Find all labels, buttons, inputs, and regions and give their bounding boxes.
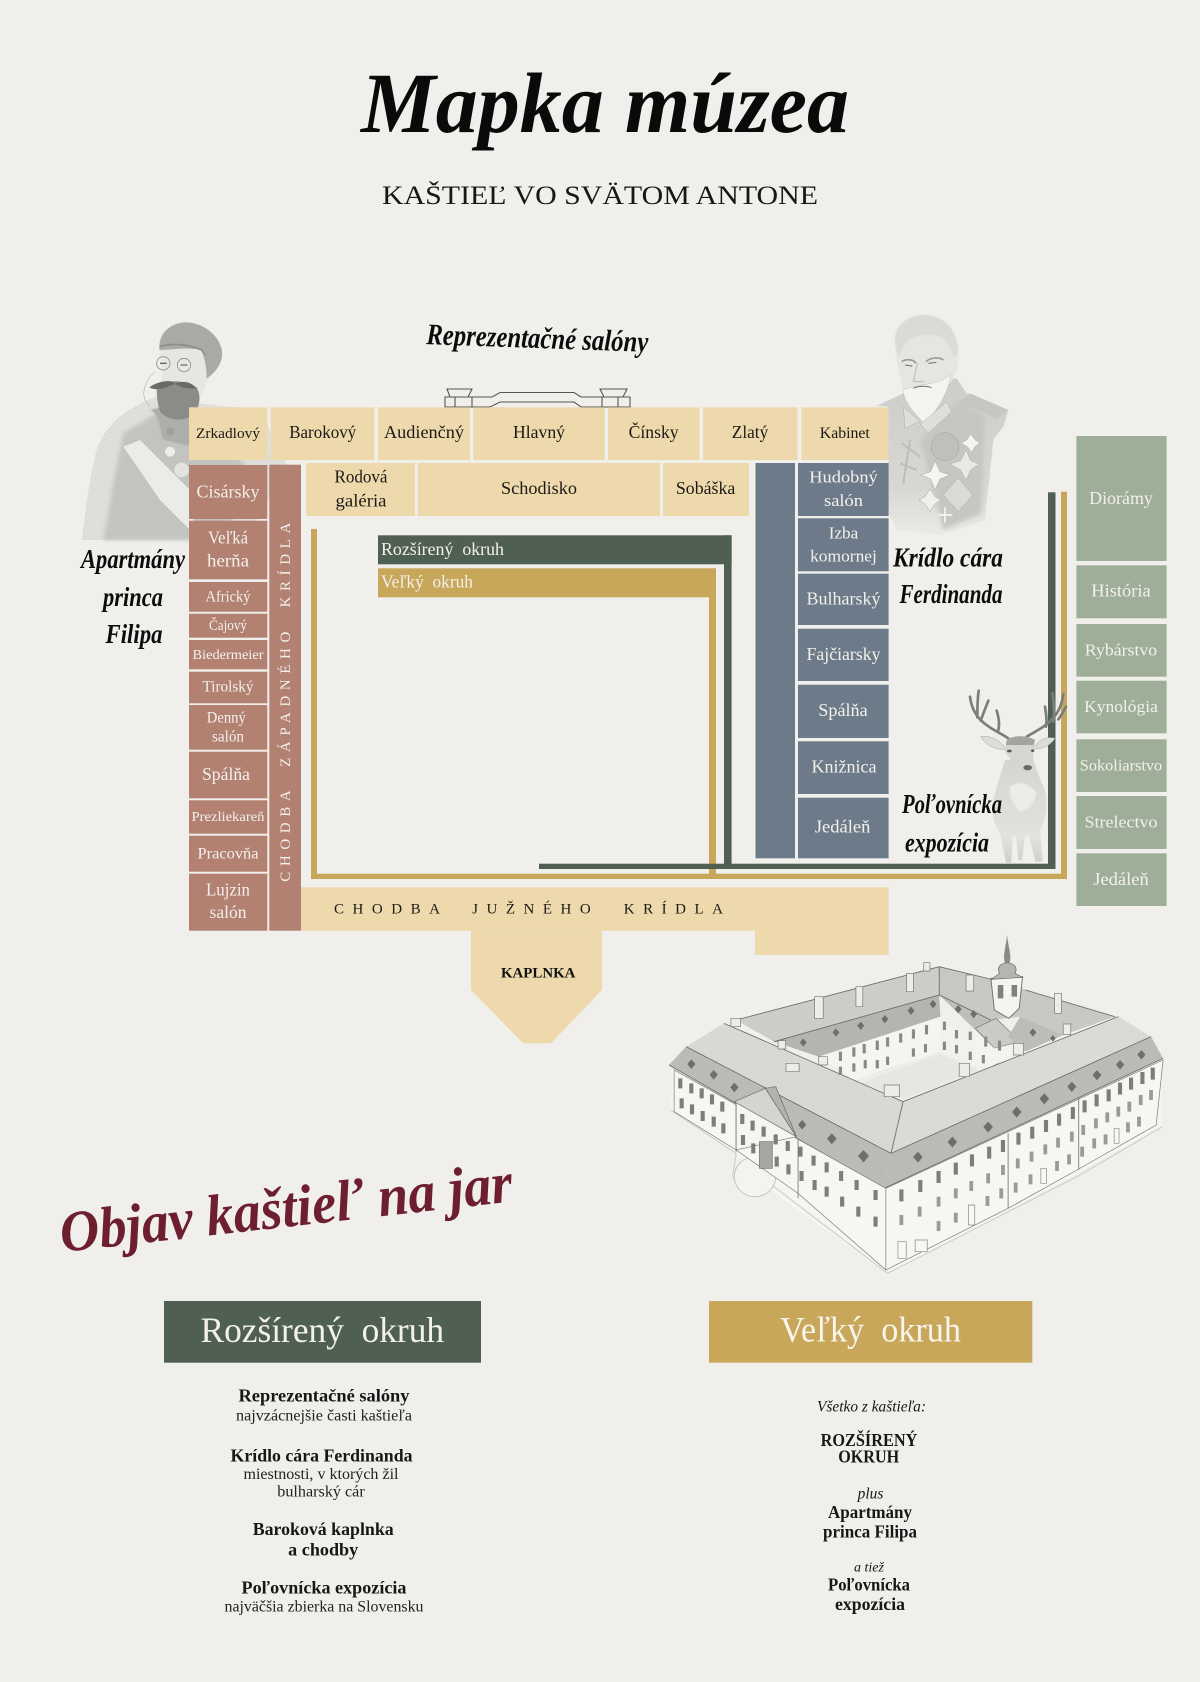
corridor: Chodba južného krídla	[301, 887, 889, 955]
room: Veľká herňa	[189, 521, 267, 579]
room: Biedermeier	[189, 640, 267, 669]
text: Reprezentačné salóny	[236, 1386, 412, 1425]
text: Rozšírený okruh	[821, 1429, 917, 1467]
room: Bulharský	[798, 574, 889, 625]
label: Apartmány princa Filipa: princa	[101, 582, 163, 612]
label: Krídlo cára Ferdinanda: Krídlo cára	[892, 543, 1003, 573]
room: Hlavný: Hlavný	[513, 422, 565, 442]
text: Krídlo cára Ferdinanda: Krídlo cára Ferdinanda	[230, 1446, 412, 1466]
room: Jedáleň	[798, 798, 889, 858]
room: Kabinet: Kabinet	[820, 425, 870, 442]
room: Izba komornej: komornej	[810, 547, 877, 566]
icon: building outline above main hall	[445, 389, 630, 407]
route line: Rozšírený okruh	[539, 492, 1056, 869]
room: Sobáška	[663, 463, 749, 516]
room: Zlatý: Zlatý	[732, 422, 768, 442]
label: Apartmány princa Filipa	[79, 544, 186, 649]
courtyard windows	[840, 1022, 1000, 1075]
room: Rodová galéria: Rodová	[334, 467, 388, 487]
panel header: Rozšírený okruh: Rozšírený okruh	[200, 1310, 444, 1350]
dormers and chimneys	[687, 1000, 1146, 1163]
corridor: Krídlo cára Ferdinanda	[756, 463, 795, 858]
text: Baroková kaplnka a chodby: Baroková kaplnka	[253, 1519, 394, 1539]
title: Mapka múzea	[359, 55, 849, 151]
room: Schodisko: Schodisko	[501, 478, 577, 498]
text: Baroková kaplnka a chodby	[253, 1519, 394, 1560]
text: Poľovnícka expozícia: Poľovnícka expozícia	[242, 1577, 406, 1597]
room: Veľká herňa: Veľká	[208, 527, 248, 547]
label: Apartmány princa Filipa: Filipa	[105, 619, 162, 649]
portrait: tsar Ferdinand	[877, 315, 1008, 535]
room: Sobáška: Sobáška	[676, 478, 735, 498]
room: Biedermeier: Biedermeier	[192, 648, 264, 663]
chapel: Kaplnka	[471, 931, 602, 1043]
room: Strelectvo	[1076, 796, 1167, 849]
legend bar: Veľký okruh	[378, 568, 716, 597]
panel: Veľký okruh	[709, 1301, 1032, 1614]
room: Barokový: Barokový	[289, 422, 356, 442]
corridor: Chodba južného krídla: CHODBA JUŽNÉHO KRÍDLA	[334, 900, 723, 917]
room: Rybárstvo	[1076, 624, 1167, 677]
corridor: Chodba západného krídla	[269, 465, 301, 931]
chapel: Kaplnka: KAPLNKA	[501, 966, 576, 982]
room: Pracovňa	[189, 836, 267, 872]
room: Izba komornej	[798, 518, 889, 571]
text: a tiež Poľovnícka expozícia: a tiež	[854, 1561, 885, 1576]
text: Reprezentačné salóny: najvzácnejšie časti kaštieľa	[236, 1408, 412, 1425]
label: Poľovnícka expozícia: expozícia	[905, 828, 989, 858]
room: Jedáleň: Jedáleň	[815, 817, 870, 837]
room: Audienčný	[378, 407, 470, 460]
room: Lujzin salón: Lujzin	[206, 880, 250, 900]
room: Lujzin salón	[189, 874, 267, 931]
text: Rozšírený okruh: ROZŠÍRENÝ	[821, 1429, 917, 1450]
room: Sokoliarstvo	[1076, 739, 1167, 792]
text: a tiež Poľovnícka expozícia: expozícia	[835, 1594, 905, 1614]
route line: Veľký okruh	[311, 492, 1067, 879]
illustration: manor house	[669, 935, 1163, 1273]
label: Poľovnícka expozícia: Poľovnícka	[901, 789, 1002, 819]
label: Poľovnícka expozícia	[901, 789, 1002, 858]
panel header: Veľký okruh	[709, 1301, 1032, 1363]
portrait: prince Filip	[82, 322, 287, 540]
tower	[991, 977, 1023, 1018]
room: Cisársky: Cisársky	[196, 481, 260, 501]
text: a tiež Poľovnícka expozícia	[828, 1561, 910, 1614]
room: Prezliekareň	[189, 800, 267, 834]
room: Zrkadlový	[189, 407, 267, 460]
room: Jedáleň: Jedáleň	[1093, 869, 1149, 889]
label: Apartmány princa Filipa: Apartmány	[79, 544, 186, 574]
text: Poľovnícka expozícia: najväčšia zbierka na Slovensku	[224, 1599, 424, 1616]
panel header: Rozšírený okruh	[164, 1301, 481, 1363]
room: Strelectvo: Strelectvo	[1085, 813, 1157, 832]
legend bar: Rozšírený okruh: Rozšírený okruh	[381, 539, 504, 559]
text: plus Apartmány princa Filipa: princa Filipa	[823, 1522, 917, 1542]
room: Jedáleň	[1076, 853, 1167, 906]
room: Diorámy	[1076, 436, 1167, 561]
room: Spálňa	[189, 752, 267, 798]
room: História	[1076, 565, 1167, 618]
room: Zlatý	[703, 407, 798, 460]
text: plus Apartmány princa Filipa	[823, 1486, 917, 1542]
room: Bulharský: Bulharský	[806, 588, 880, 608]
room: Diorámy: Diorámy	[1089, 488, 1153, 508]
room: Spálňa: Spálňa	[818, 700, 868, 720]
room: Tirolský	[189, 672, 267, 703]
room: Denný salón: Denný	[207, 709, 246, 726]
room: Sokoliarstvo: Sokoliarstvo	[1080, 758, 1162, 775]
room: Audienčný: Audienčný	[384, 422, 464, 442]
room: Prezliekareň: Prezliekareň	[192, 810, 264, 825]
room: Zrkadlový: Zrkadlový	[196, 426, 261, 442]
room: Denný salón	[189, 705, 267, 750]
label: Krídlo cára Ferdinanda	[892, 543, 1003, 609]
windows	[680, 1068, 1153, 1227]
legend bar: Veľký okruh: Veľký okruh	[381, 572, 473, 592]
legend bar: Rozšírený okruh	[378, 535, 732, 564]
room: Africký	[189, 582, 267, 612]
room: Cisársky	[189, 465, 267, 519]
text: Krídlo cára Ferdinanda: bulharský cár	[277, 1484, 366, 1501]
room: Hudobný salón: Hudobný	[809, 467, 878, 486]
room: Barokový	[271, 407, 374, 460]
room: Fajčiarsky	[798, 629, 889, 681]
room: Pracovňa: Pracovňa	[198, 846, 258, 863]
text: Krídlo cára Ferdinanda	[230, 1446, 412, 1501]
room: Lujzin salón: salón	[210, 902, 246, 922]
text: Rozšírený okruh: OKRUH	[838, 1447, 899, 1467]
room: Čajový: Čajový	[209, 617, 247, 634]
room: Spálňa: Spálňa	[202, 764, 250, 784]
room: Veľká herňa: herňa	[207, 551, 249, 571]
room: Čínsky: Čínsky	[629, 421, 679, 442]
room: Fajčiarsky: Fajčiarsky	[806, 644, 880, 664]
room: Knižnica: Knižnica	[812, 757, 877, 777]
room: História: História	[1091, 581, 1151, 601]
heading: Objav kaštieľ na jar: Objav kaštieľ na jar	[56, 1150, 516, 1265]
text: a tiež Poľovnícka expozícia: Poľovnícka	[828, 1575, 910, 1595]
floor plan	[189, 389, 1067, 1043]
room: Izba komornej: Izba	[829, 523, 859, 542]
text: Reprezentačné salóny: Reprezentačné salóny	[238, 1386, 410, 1406]
panel header: Veľký okruh: Veľký okruh	[780, 1310, 961, 1350]
text: Poľovnícka expozícia	[224, 1577, 424, 1616]
text: Krídlo cára Ferdinanda: miestnosti, v ktorých žil	[244, 1466, 398, 1483]
room: Kynológia: Kynológia	[1084, 697, 1158, 716]
text: plus Apartmány princa Filipa: plus	[857, 1486, 883, 1503]
room: Tirolský: Tirolský	[202, 679, 254, 696]
room: Kynológia	[1076, 681, 1167, 733]
text: Všetko z kaštieľa: Všetko z kaštieľa:	[817, 1399, 926, 1416]
room: Knižnica	[798, 741, 889, 794]
room: Hudobný salón	[798, 463, 889, 516]
room: Africký: Africký	[206, 589, 250, 606]
panel: Rozšírený okruh	[164, 1301, 481, 1616]
room: Schodisko	[418, 463, 660, 516]
room: Rodová galéria: galéria	[336, 491, 387, 511]
room: Rodová galéria	[306, 463, 415, 516]
text: plus Apartmány princa Filipa: Apartmány	[828, 1502, 912, 1522]
corridor: Chodba západného krídla: CHODBA ZÁPADNÉHO KRÍDLA	[277, 523, 294, 882]
room: Rybárstvo: Rybárstvo	[1085, 641, 1157, 660]
heading: Reprezentačné salóny: Reprezentačné salóny	[425, 318, 649, 359]
label: Krídlo cára Ferdinanda: Ferdinanda	[899, 579, 1002, 609]
text: Baroková kaplnka a chodby: a chodby	[288, 1540, 358, 1560]
room: Hudobný salón: salón	[824, 491, 864, 510]
room: Hlavný	[473, 407, 605, 460]
subtitle: KAŠTIEĽ VO SVÄTOM ANTONE	[382, 181, 818, 210]
room: Čínsky	[608, 407, 700, 460]
room: Denný salón: salón	[212, 728, 244, 745]
room: Spálňa	[798, 685, 889, 738]
illustration: deer	[970, 691, 1066, 863]
hunting exhibition rooms	[1076, 436, 1167, 906]
room: Kabinet	[801, 407, 889, 460]
room: Čajový	[189, 614, 267, 638]
